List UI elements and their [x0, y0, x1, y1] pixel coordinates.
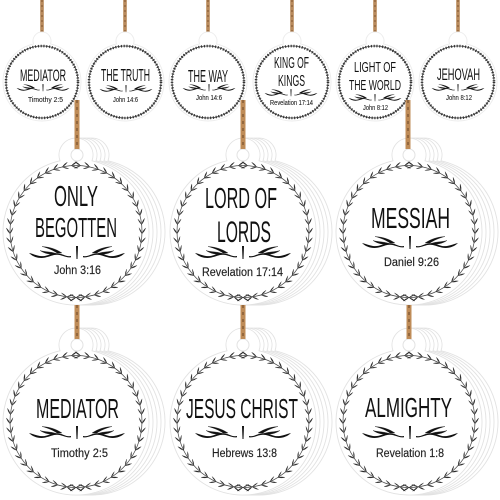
ornament — [362, 236, 458, 249]
large tag stack: Only Begotten — [0, 100, 165, 321]
title: ONLY — [54, 181, 98, 213]
small tag: Mediator — [3, 0, 81, 121]
title: MESSIAH — [371, 203, 450, 235]
ornament — [29, 246, 125, 259]
twine — [290, 0, 294, 38]
verse: Daniel 9:26 — [384, 257, 439, 269]
large tag stack: Almighty — [323, 305, 498, 500]
ornament — [265, 89, 317, 96]
small tag: Light of the World — [336, 0, 414, 121]
small tag: King of Kings — [253, 0, 331, 121]
verse: Revelation 1:8 — [376, 448, 444, 460]
large tag stack: Mediator — [0, 305, 165, 500]
verse: John 8:12 — [446, 95, 472, 102]
ornament — [100, 85, 152, 92]
title: MEDIATOR — [20, 67, 66, 85]
large tag stack: Only Begotten: BEGOTTEN — [35, 212, 117, 243]
wreath — [89, 46, 161, 118]
wreath — [0, 161, 162, 321]
twine — [456, 0, 460, 38]
small tag: King of Kings: KINGS — [278, 73, 305, 90]
large tag stack: Jesus Christ — [157, 305, 332, 500]
twine — [240, 100, 246, 149]
wreath — [323, 161, 495, 321]
wreath — [256, 46, 328, 118]
large tag stack: Messiah — [323, 100, 498, 321]
ornament — [29, 426, 125, 439]
title: LORD OF — [205, 183, 277, 215]
twine — [40, 0, 44, 38]
wreath — [339, 46, 411, 118]
twine — [373, 0, 377, 38]
title: THE WAY — [188, 66, 228, 86]
twine — [406, 100, 410, 149]
verse: John 8:12 — [363, 105, 388, 112]
wreath — [157, 351, 329, 500]
verse: John 14:6 — [196, 95, 222, 102]
large tag stack: Lord of Lords — [157, 100, 332, 321]
verse: John 3:16 — [54, 265, 101, 277]
ornament — [17, 84, 69, 91]
twine — [406, 305, 412, 339]
small tag: Light of the World: THE WORLD — [349, 77, 401, 94]
large tag stack: Lord of Lords: LORDS — [217, 216, 271, 249]
twine — [240, 305, 246, 339]
wreath — [0, 351, 162, 500]
twine — [123, 0, 127, 38]
twine — [74, 100, 80, 149]
small tag: The Truth — [86, 0, 164, 121]
verse: Timothy 2:5 — [51, 448, 108, 460]
twine — [206, 0, 210, 38]
verse: Hebrews 13:8 — [212, 448, 277, 460]
small tag: The Way — [169, 0, 247, 121]
wreath — [323, 351, 495, 500]
small tag: The Truth: THE TRUTH — [101, 65, 150, 85]
title: KING OF — [274, 55, 309, 72]
ornament — [362, 426, 458, 439]
twine — [74, 305, 80, 339]
ornament — [432, 84, 484, 91]
title: JESUS CHRIST — [186, 393, 298, 424]
ornament — [195, 246, 291, 259]
wreath — [6, 46, 78, 118]
wreath — [172, 46, 244, 118]
verse: Timothy 2:5 — [28, 97, 63, 104]
verse: Revelation 17:14 — [202, 267, 284, 279]
small tag: Jehovah — [419, 0, 497, 121]
wreath — [157, 161, 329, 321]
verse: Revelation 17:14 — [270, 100, 313, 107]
title: LIGHT OF — [354, 59, 396, 76]
verse: John 14:6 — [113, 97, 138, 104]
wreath — [422, 46, 494, 118]
title: MEDIATOR — [36, 393, 119, 424]
ornament — [195, 426, 291, 439]
ornament — [349, 94, 401, 101]
ornament — [183, 84, 235, 91]
